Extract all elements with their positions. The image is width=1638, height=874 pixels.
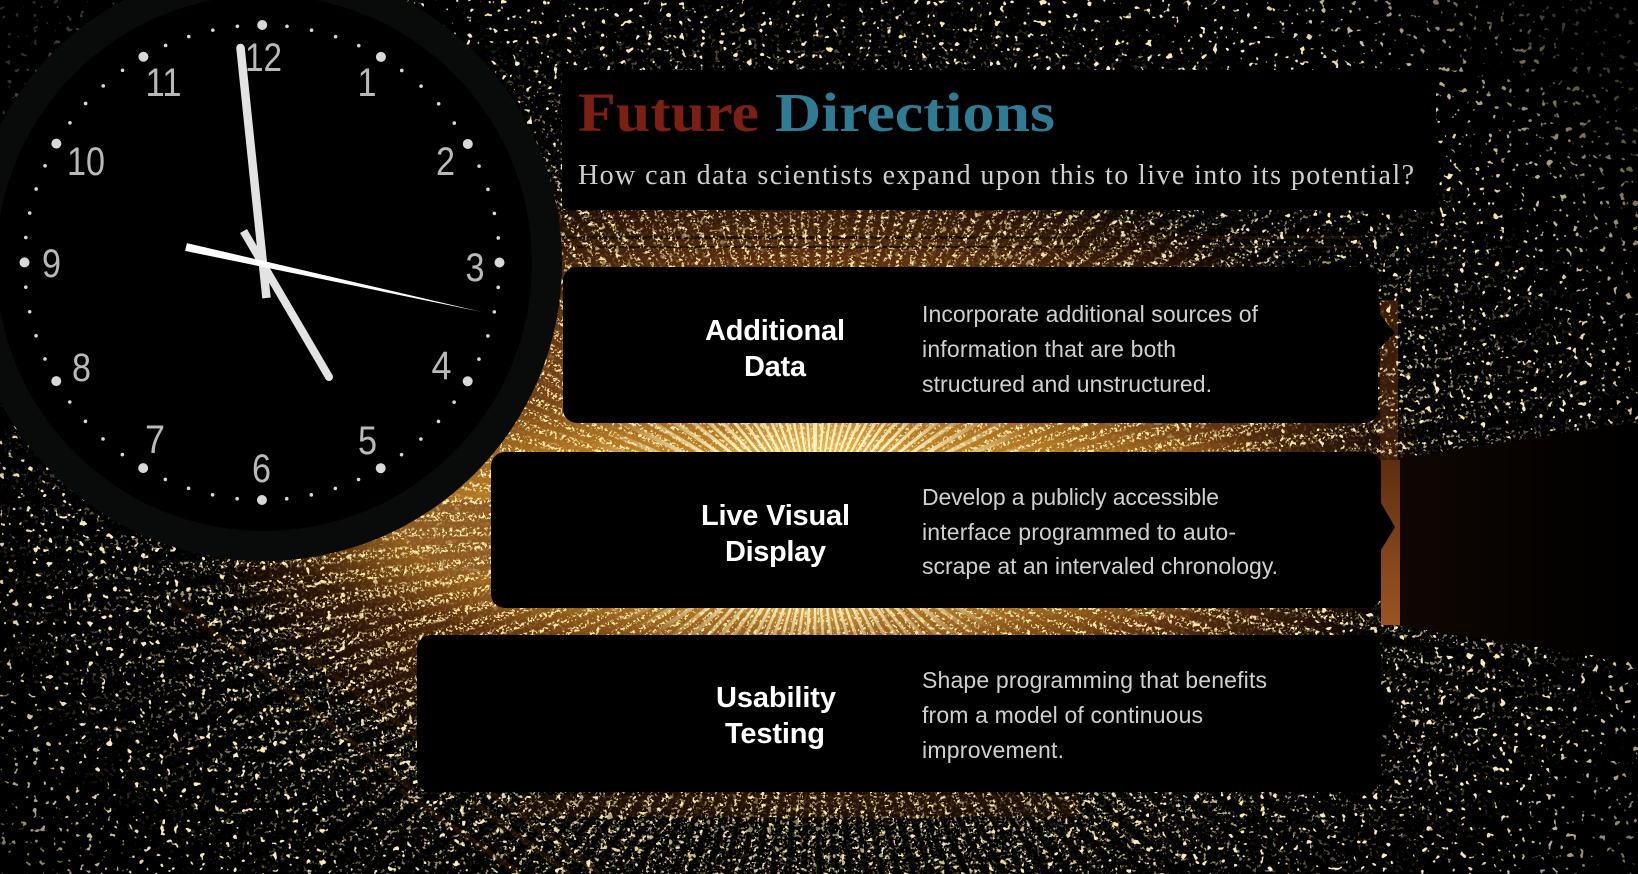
card heading: Display <box>725 536 826 568</box>
panel: Usability Testing <box>417 635 1395 792</box>
subtitle: How can data scientists expand upon this to live into its potential? <box>578 160 1414 191</box>
card description: Develop a publicly accessible <box>922 484 1219 510</box>
clock numerals: 7 <box>145 418 165 462</box>
fine dense lights <box>166 140 1454 874</box>
card description: information that are both <box>922 336 1176 362</box>
hour hand <box>244 231 333 381</box>
card description: Shape programming that benefits <box>922 667 1267 693</box>
card heading: Usability <box>716 682 836 714</box>
card description: improvement. <box>922 737 1064 763</box>
minute hand <box>236 44 266 298</box>
card description: from a model of continuous <box>922 702 1203 728</box>
clock numerals: 6 <box>252 447 271 491</box>
clock numerals: 12 <box>245 36 282 80</box>
panel: Live Visual Display <box>491 452 1395 608</box>
clock numerals: 10 <box>67 140 105 184</box>
heading: Future Directions: Directions <box>775 82 1055 143</box>
card description: interface programmed to auto- <box>922 519 1236 545</box>
ceiling and floor structure <box>173 236 1398 874</box>
second hand <box>185 243 482 312</box>
card description: Incorporate additional sources of <box>922 301 1259 327</box>
card heading: Live Visual <box>701 500 850 532</box>
clock face <box>0 0 532 531</box>
hour ticks <box>24 25 500 500</box>
card description: structured and unstructured. <box>922 371 1212 397</box>
card description: scrape at an intervaled chronology. <box>922 553 1278 579</box>
clock <box>0 0 562 561</box>
minute ticks <box>24 25 500 500</box>
heading: Future Directions: Future <box>578 82 759 143</box>
panel: Additional Data <box>563 267 1395 423</box>
clock numerals: 2 <box>436 140 455 184</box>
clock numerals: 3 <box>466 246 484 290</box>
clock numerals <box>42 36 484 491</box>
card heading: Data <box>744 351 807 383</box>
clock numerals: 1 <box>358 61 376 105</box>
clock rim <box>0 0 562 561</box>
card heading: Testing <box>725 718 825 750</box>
clock numerals: 5 <box>358 419 377 463</box>
clock numerals: 4 <box>432 344 452 388</box>
card heading: Additional <box>705 315 845 347</box>
clock numerals: 8 <box>72 346 91 390</box>
panel: title block <box>562 70 1436 210</box>
clock numerals: 11 <box>146 61 182 105</box>
clock numerals: 9 <box>42 242 61 286</box>
white rays at the vanishing point <box>596 423 1034 635</box>
